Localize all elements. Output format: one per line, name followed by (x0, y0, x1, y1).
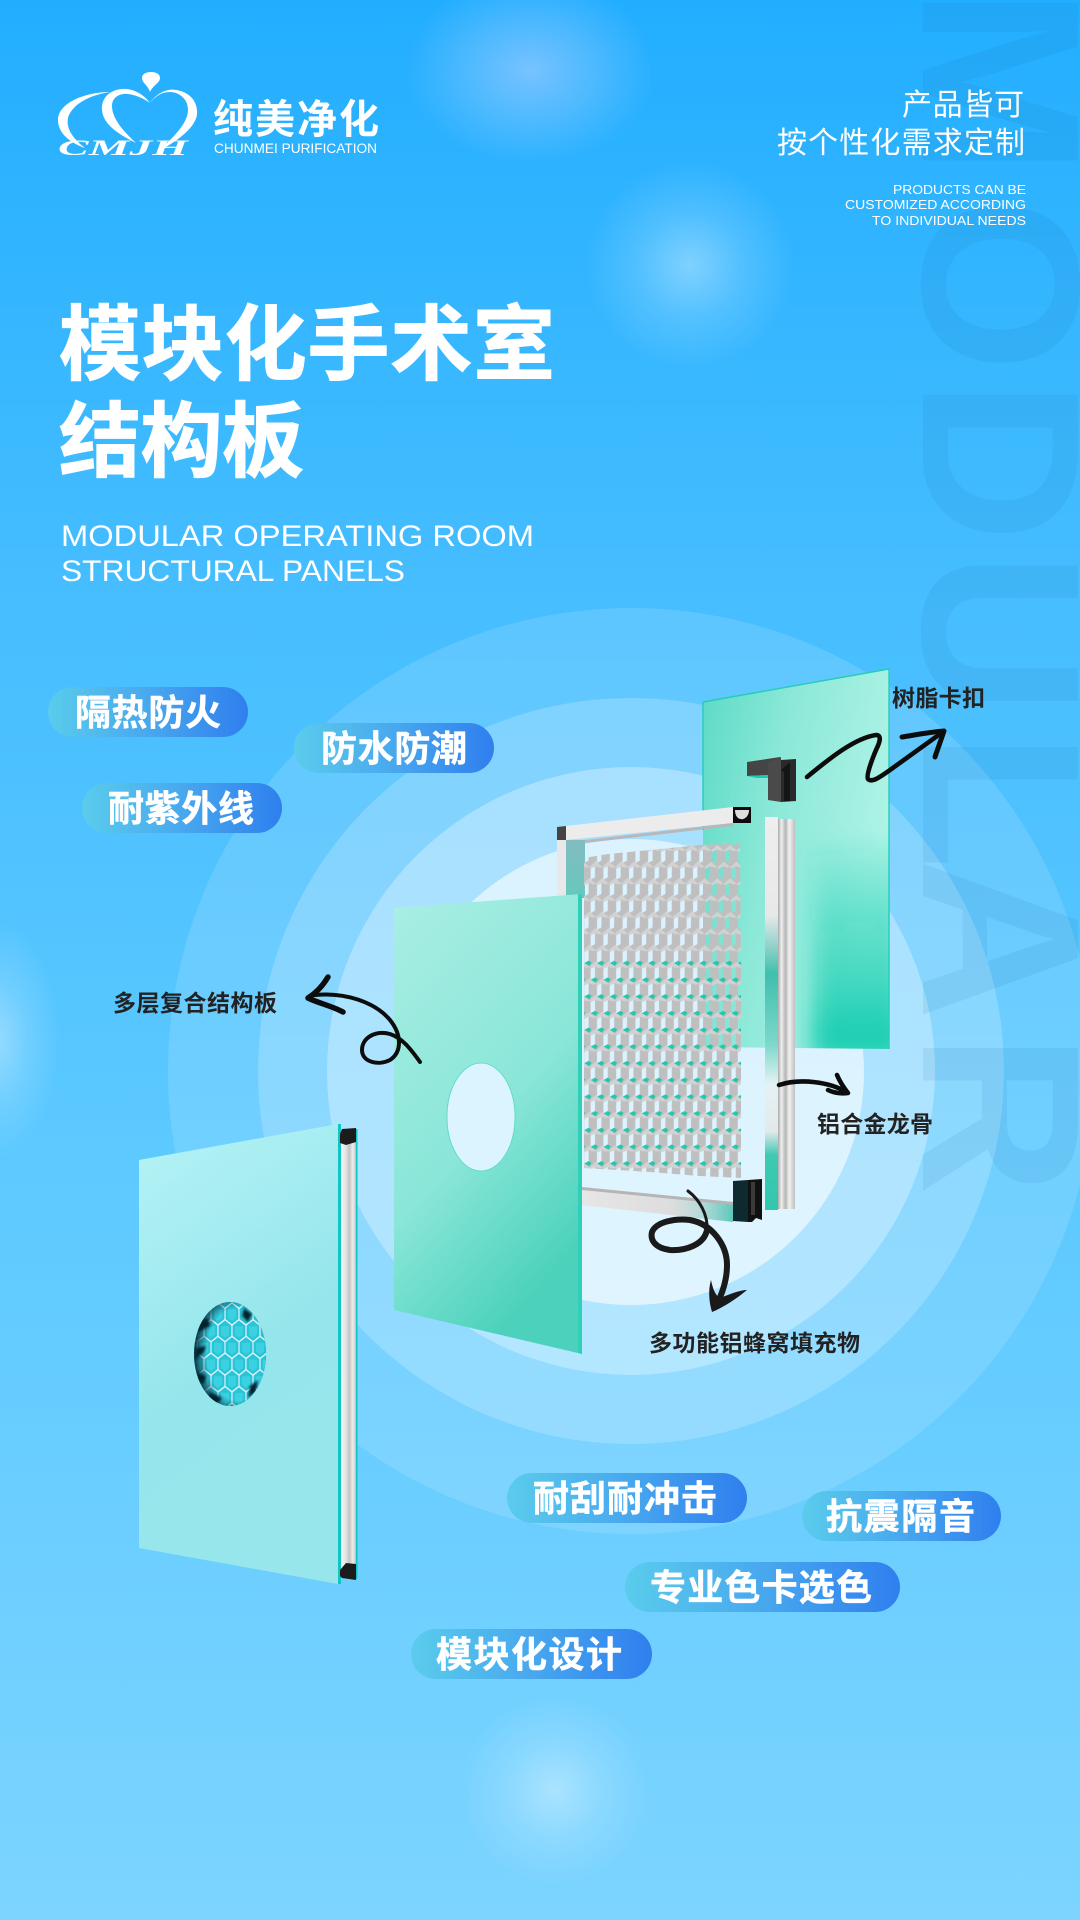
logo english name: CHUNMEI PURIFICATION (214, 141, 377, 156)
feature pill: 抗震隔音: 抗震隔音 (826, 1496, 975, 1537)
frame top bar end (733, 807, 751, 823)
front assembled panel (139, 1124, 358, 1584)
edge clips (340, 1128, 356, 1145)
feature pill: 专业色卡选色: 专业色卡选色 (650, 1567, 872, 1608)
arrow to keel (779, 1075, 848, 1093)
english title: STRUCTURAL PANELS (61, 555, 405, 588)
ghost vertical word MODULAR (875, 0, 1080, 1196)
logo (58, 72, 379, 160)
feature pill: 抗震隔音 (802, 1491, 1001, 1541)
note chinese line 2: 按个性化需求定制 (777, 127, 1025, 160)
english title (61, 520, 534, 588)
main title: 结构板 (59, 397, 304, 488)
aluminium keel bar (765, 817, 795, 1210)
feature pill: 耐刮耐冲击: 耐刮耐冲击 (533, 1478, 717, 1519)
logo mark: CMJH (58, 135, 190, 160)
logo chinese name: 纯美净化 (213, 98, 379, 142)
english title: MODULAR OPERATING ROOM (61, 520, 534, 553)
feature pill: 防水防潮: 防水防潮 (321, 728, 467, 769)
panel face (139, 1124, 338, 1584)
logo mark (58, 72, 197, 160)
background soft glows (0, 0, 795, 1885)
feature pill: 隔热防火 (48, 687, 248, 737)
label: 多功能铝蜂窝填充物: 多功能铝蜂窝填充物 (649, 1330, 860, 1356)
label: 多层复合结构板: 多层复合结构板 (113, 990, 277, 1016)
aluminium frame (557, 807, 751, 1222)
bottom black clip (733, 1179, 762, 1222)
feature pill: 耐刮耐冲击 (507, 1473, 747, 1523)
note english lines: CUSTOMIZED ACCORDING (845, 198, 1026, 212)
middle teal panel with hole (394, 894, 582, 1354)
note english lines: PRODUCTS CAN BE (893, 183, 1026, 197)
frame bottom bar (582, 1187, 733, 1222)
feature pill: 专业色卡选色 (625, 1562, 900, 1612)
feature pill: 防水防潮 (294, 723, 494, 773)
frame top bar (566, 807, 733, 840)
label: 树脂卡扣: 树脂卡扣 (892, 685, 985, 711)
customization note (777, 89, 1026, 228)
feature pill: 耐紫外线 (82, 783, 282, 833)
feature pill: 模块化设计 (411, 1629, 652, 1679)
main title: 模块化手术室 (59, 300, 555, 391)
label: 铝合金龙骨: 铝合金龙骨 (817, 1111, 933, 1137)
frame left post (557, 840, 566, 900)
feature pill: 模块化设计: 模块化设计 (436, 1634, 622, 1675)
rear teal panel (702, 668, 890, 1049)
resin clip part (747, 757, 796, 802)
feature pill: 耐紫外线: 耐紫外线 (108, 788, 254, 829)
concentric background rings (168, 608, 1080, 1534)
feature pill: 隔热防火: 隔热防火 (75, 692, 221, 733)
arrow to composite panel (308, 977, 420, 1063)
note english lines (845, 183, 1026, 228)
arrow to honeycomb filler (652, 1191, 747, 1312)
main title (59, 300, 555, 488)
note english lines: TO INDIVIDUAL NEEDS (872, 214, 1026, 228)
note chinese line 1: 产品皆可 (902, 89, 1024, 122)
panel right edge profile (338, 1124, 341, 1584)
arrow to resin clip (807, 731, 944, 780)
porthole showing honeycomb (194, 1302, 266, 1406)
aluminium honeycomb filler (584, 843, 741, 1178)
